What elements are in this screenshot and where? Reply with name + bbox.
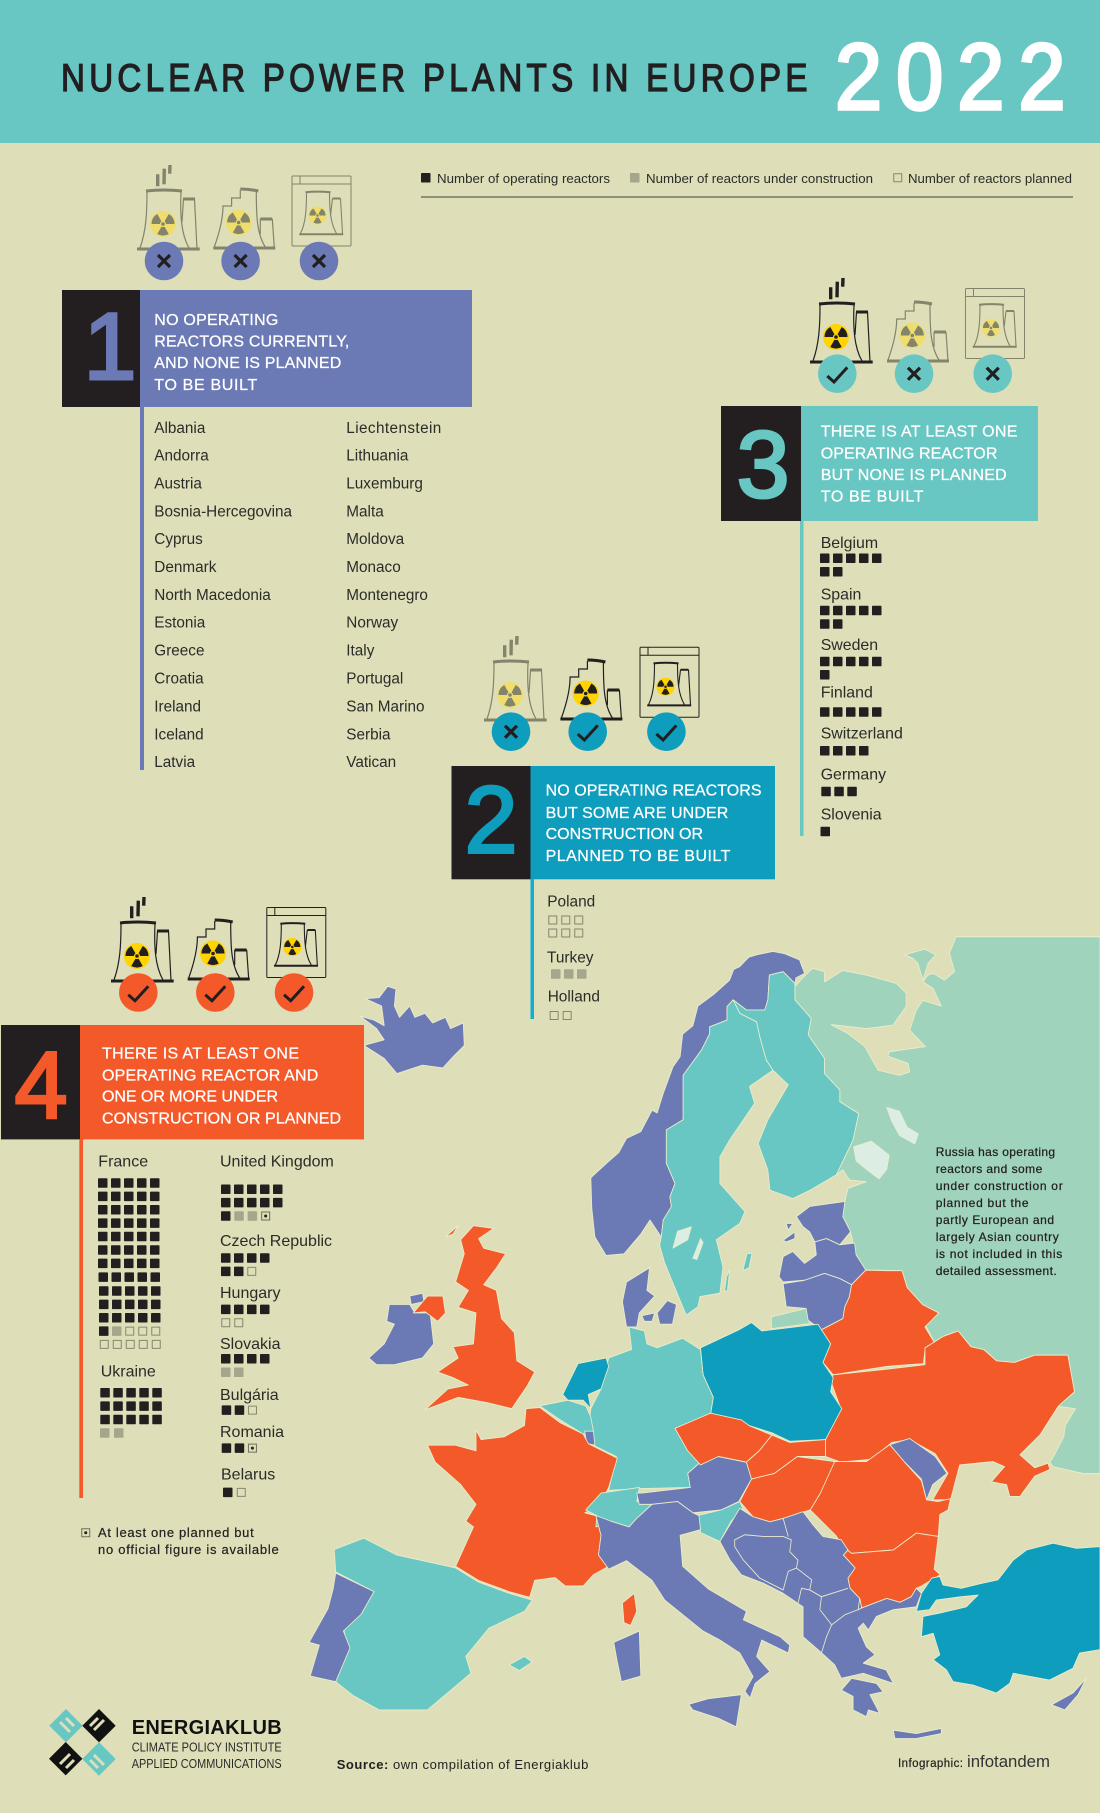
country list 4: Hungary — [220, 1285, 280, 1302]
footnote: no official figure is available — [98, 1542, 279, 1557]
country list 1: Montenegro — [346, 587, 428, 604]
legend: Number of reactors under construction — [646, 171, 873, 186]
panel 4: operating and coming — [1, 897, 364, 1557]
country list 1: Lithuania — [346, 448, 409, 465]
Outer Hebrides — [445, 1226, 458, 1237]
Sardinia — [614, 1631, 641, 1682]
country list 1: Albania — [154, 420, 206, 437]
country list 1: Monaco — [346, 559, 401, 576]
country list 1: Denmark — [154, 559, 217, 576]
country list 1: Portugal — [346, 670, 403, 688]
logo mark — [49, 1709, 116, 1776]
Russia note: is not included in this — [936, 1247, 1062, 1261]
Romania — [810, 1445, 951, 1553]
heading box 3: BUT NONE IS PLANNED — [821, 467, 1007, 484]
country list 1: North Macedonia — [154, 587, 271, 604]
heading box 3: THERE IS AT LEAST ONE — [821, 424, 1017, 441]
country list 1: Liechtenstein — [346, 420, 441, 437]
legend: Number of operating reactors — [437, 171, 611, 186]
country list 4: France — [98, 1154, 148, 1171]
country list 2: Holland — [548, 989, 600, 1006]
Russia note: planned but the — [936, 1196, 1029, 1210]
country list 2: Poland — [547, 894, 595, 911]
Moldova — [890, 1438, 947, 1500]
heading box 1: NO OPERATING — [154, 312, 278, 329]
Denmark — [622, 1268, 677, 1327]
panel 1: no reactors — [62, 165, 472, 771]
heading box 3: OPERATING REACTOR — [821, 445, 997, 462]
logo: Energiaklub: ENERGIAKLUB — [132, 1717, 282, 1739]
country list 3: Spain — [821, 586, 861, 603]
legend: Number of reactors planned — [908, 171, 1072, 186]
connector line 3 — [800, 521, 804, 836]
Austria — [637, 1456, 752, 1513]
source credit: Source: own compilation of Energiaklub — [337, 1757, 588, 1772]
country list 3: Belgium — [821, 535, 878, 552]
country list 1: Cyprus — [154, 531, 203, 548]
heading box 1: AND NONE IS PLANNED — [154, 355, 341, 372]
Russia note — [936, 1145, 1063, 1278]
country list 3: Germany — [821, 766, 886, 783]
country list 2: Turkey — [547, 950, 594, 967]
year: 2022 — [835, 24, 1065, 129]
Belgium — [540, 1400, 593, 1434]
panel 3: operating, none planned — [721, 278, 1038, 836]
Russia note: reactors and some — [936, 1162, 1043, 1176]
Ukraine — [826, 1331, 1074, 1500]
Bulgaria — [843, 1533, 940, 1608]
connector line 1 — [140, 407, 144, 770]
country list 1: Norway — [346, 615, 399, 632]
heading box 4 — [1, 1025, 364, 1139]
logo: Energiaklub: APPLIED COMMUNICATIONS — [132, 1756, 282, 1771]
country list 1: Vatican — [346, 754, 396, 771]
country list 3: Slovenia — [821, 806, 882, 823]
heading box 3 — [721, 406, 1038, 521]
Spain — [334, 1538, 532, 1710]
France — [428, 1408, 617, 1597]
country list 1: Moldova — [346, 531, 405, 548]
Czech Republic — [675, 1413, 772, 1465]
country list 3: Sweden — [821, 637, 878, 654]
heading box 2: PLANNED TO BE BUILT — [546, 848, 731, 865]
Germany — [588, 1327, 713, 1490]
country list 4: United Kingdom — [220, 1154, 334, 1171]
Sicily — [689, 1695, 741, 1727]
Russia note: detailed assessment. — [936, 1264, 1057, 1278]
footnote: At least one planned but — [98, 1525, 254, 1540]
country list 3 — [821, 535, 903, 835]
Russia note: under construction or — [936, 1179, 1063, 1193]
heading box 1 — [62, 290, 472, 407]
Balkan borders — [735, 1518, 862, 1653]
Balkans — [720, 1508, 921, 1683]
country list 1: Andorra — [154, 448, 209, 465]
country list 1: Latvia — [154, 754, 196, 771]
Russia note: largely Asian country — [936, 1230, 1059, 1244]
heading box 4: CONSTRUCTION OR PLANNED — [102, 1110, 341, 1127]
heading box 2: CONSTRUCTION OR — [546, 826, 703, 843]
country list 4: Ukraine — [101, 1363, 156, 1380]
infographic credit: Infographic: — [898, 1758, 963, 1770]
country list 3: Finland — [821, 685, 873, 702]
heading box 1: REACTORS CURRENTLY, — [154, 334, 349, 351]
icons: plants with three checks — [111, 897, 326, 1012]
Baltic states — [779, 1201, 866, 1330]
country list 4: Bulgária — [220, 1387, 279, 1404]
Hungary — [740, 1456, 835, 1522]
Iceland — [360, 986, 464, 1074]
title: NUCLEAR POWER PLANTS IN EUROPE — [61, 57, 807, 100]
country list 1: Croatia — [154, 670, 204, 688]
country list 4 — [98, 1154, 334, 1496]
country list 1: Estonia — [154, 615, 206, 632]
Poland — [701, 1322, 842, 1441]
Peloponnese — [841, 1678, 883, 1717]
Northern Ireland — [413, 1296, 445, 1321]
Russia note: partly European and — [936, 1213, 1054, 1227]
heading box 2: BUT SOME ARE UNDER — [546, 805, 728, 822]
logo: Energiaklub — [49, 1709, 282, 1776]
legend — [421, 171, 1073, 198]
country list 1: Serbia — [346, 726, 391, 743]
map of Europe — [309, 937, 1100, 1739]
country list 1: Italy — [346, 643, 375, 660]
icons: three crossed plants — [137, 165, 351, 280]
Balearic islands — [509, 1656, 532, 1670]
Ireland — [369, 1293, 434, 1365]
Slovenia — [697, 1502, 743, 1542]
Luxembourg — [585, 1431, 595, 1445]
heading box 4: ONE OR MORE UNDER — [102, 1088, 278, 1105]
Portugal — [309, 1573, 374, 1682]
heading box 4: OPERATING REACTOR AND — [102, 1067, 318, 1084]
Great Britain — [425, 1226, 535, 1410]
country list 4: Slovakia — [220, 1336, 281, 1353]
country list 4: Romania — [220, 1424, 284, 1441]
header banner — [0, 0, 1100, 143]
logo: Energiaklub: CLIMATE POLICY INSTITUTE — [132, 1740, 282, 1755]
connector line 2 — [530, 879, 534, 1019]
country list 4: Belarus — [221, 1467, 275, 1484]
Italy — [596, 1502, 790, 1698]
country list 1: Austria — [154, 476, 202, 493]
country list 1: Bosnia-Hercegovina — [154, 504, 293, 520]
country list 1: Ireland — [154, 698, 201, 715]
Sweden — [660, 1000, 773, 1315]
heading box 2: NO OPERATING REACTORS — [546, 783, 762, 800]
Turkey — [916, 1543, 1100, 1693]
icons: plants with two checks — [484, 636, 699, 751]
country list 1: Malta — [346, 504, 384, 520]
heading box 2 — [452, 766, 775, 879]
Belarus — [821, 1270, 939, 1375]
icons: plants with one check — [810, 278, 1024, 393]
country list 1: Iceland — [154, 726, 204, 743]
heading box 4: 4 — [15, 1033, 67, 1139]
country list 1: Greece — [154, 643, 204, 660]
Switzerland — [586, 1487, 652, 1527]
Slovakia — [746, 1435, 826, 1479]
Russia note: Russia has operating — [936, 1145, 1055, 1159]
country list 4: Czech Republic — [220, 1233, 332, 1250]
Finland — [733, 972, 859, 1199]
panel 2: none operating, some coming — [452, 636, 775, 1019]
heading box 1: 1 — [84, 294, 136, 400]
heading box 3: TO BE BUILT — [821, 489, 924, 506]
infographic credit — [898, 1752, 1050, 1771]
Corsica — [622, 1593, 637, 1625]
Netherlands — [563, 1358, 609, 1409]
connector line 4 — [79, 1139, 83, 1498]
Crete — [893, 1728, 941, 1739]
country list 2 — [547, 894, 600, 1019]
Russia — [771, 937, 1100, 1473]
country list 1: San Marino — [346, 698, 425, 715]
Norway — [591, 951, 805, 1255]
country list 1: Luxemburg — [346, 476, 423, 493]
footnote — [82, 1525, 279, 1557]
Swedish lakes and islands — [673, 1227, 752, 1292]
Cyprus — [1052, 1678, 1086, 1710]
heading box 3: 3 — [737, 412, 789, 518]
heading box 1: TO BE BUILT — [154, 377, 258, 394]
infographic credit: infotandem — [967, 1752, 1050, 1771]
country list 1 — [154, 420, 441, 771]
heading box 4: THERE IS AT LEAST ONE — [102, 1046, 299, 1063]
country list 3: Switzerland — [821, 726, 903, 743]
heading box 2: 2 — [465, 768, 517, 874]
